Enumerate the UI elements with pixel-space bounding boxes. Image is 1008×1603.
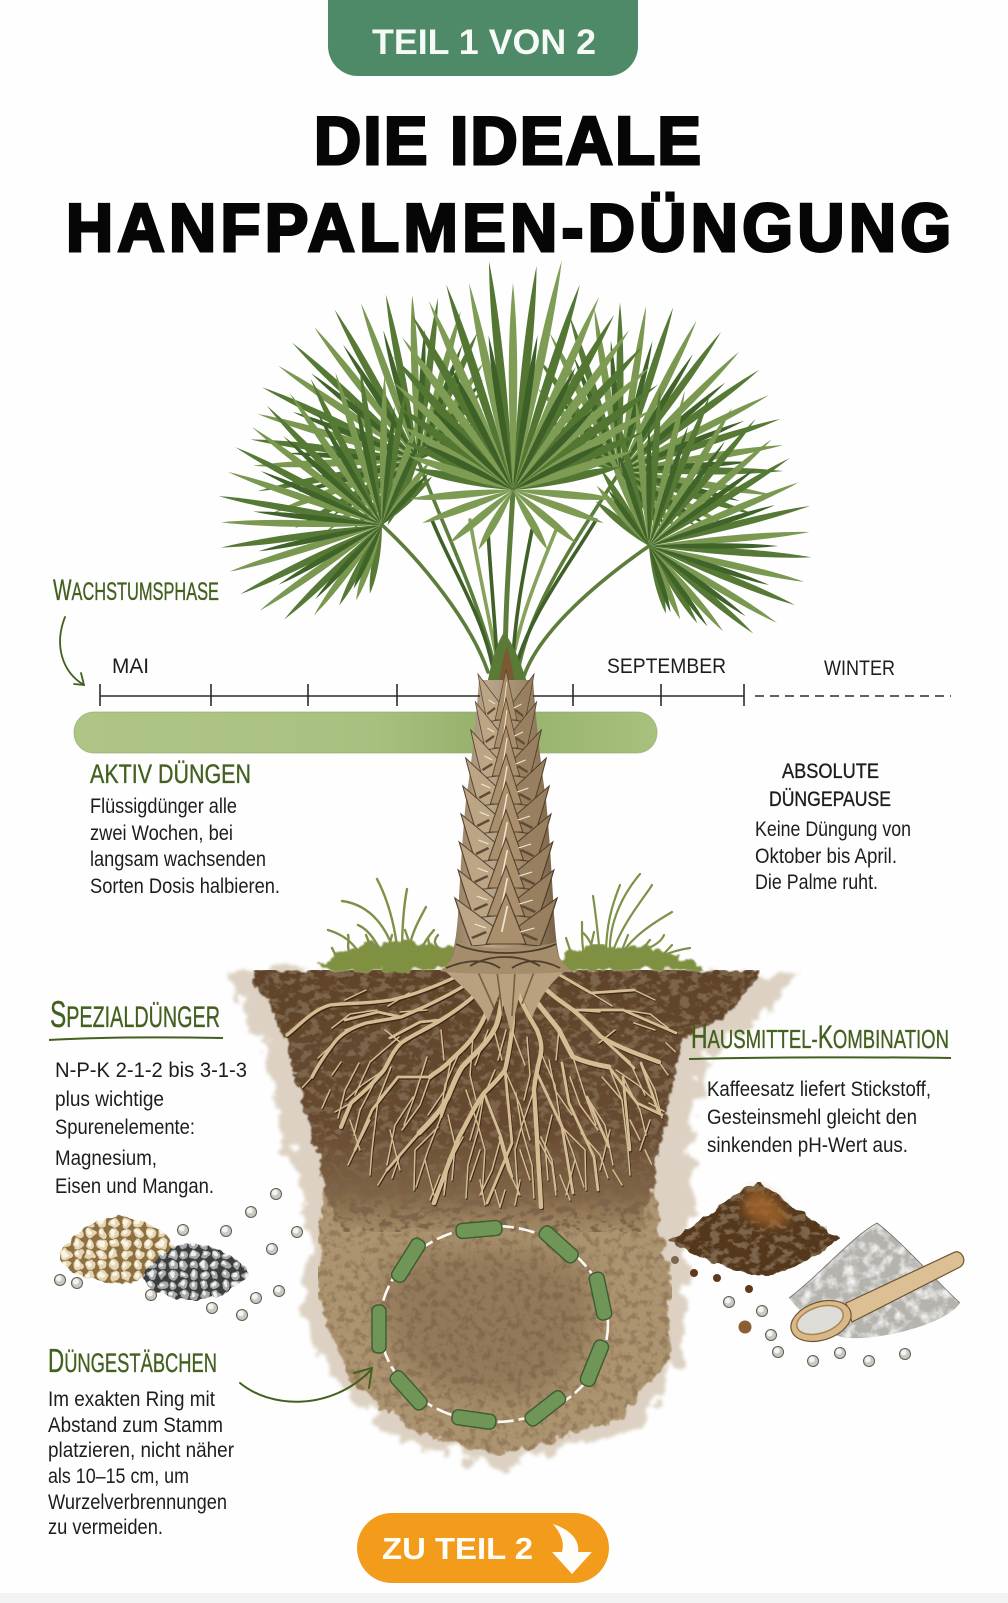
text block: Absolute Düngepause: Oktober bis April. (755, 845, 897, 868)
coffee grounds (668, 1182, 840, 1276)
badge: Teil 1 von 2 (328, 0, 638, 76)
grey granules (143, 1243, 248, 1300)
lower right frond (557, 344, 861, 673)
text block: Düngestäbchen: Im exakten Ring mit (48, 1388, 215, 1411)
text block: Aktiv düngen: langsam wachsenden (90, 848, 266, 871)
trunk (440, 670, 572, 974)
heading: Wachstumsphase: WACHSTUMSPHASE (53, 574, 219, 607)
scattered crumbs (724, 1296, 734, 1308)
stems (382, 460, 649, 680)
text block: Spezialdünger: plus wichtige (55, 1088, 164, 1111)
text block: Aktiv düngen: Flüssigdünger alle (90, 795, 237, 818)
upper left frond (197, 241, 532, 580)
text block: Aktiv düngen: AKTIV DÜNGEN (90, 759, 251, 789)
text block: Hausmittel-Kombination (689, 1019, 951, 1157)
text block: Spezialdünger (49, 994, 247, 1198)
text block: Düngestäbchen: platzieren, nicht näher (48, 1439, 234, 1462)
text block: Absolute Düngepause (755, 760, 911, 894)
button: Zu Teil 2: ZU TEIL 2 (382, 1531, 533, 1566)
text block: Düngestäbchen: als 10–15 cm, um (48, 1465, 189, 1488)
text block: Düngestäbchen: Abstand zum Stamm (48, 1414, 223, 1437)
label: Mai: MAI (112, 655, 149, 678)
text block: Spezialdünger: N-P-K 2-1-2 bis 3-1-3 (55, 1059, 247, 1082)
label: September: SEPTEMBER (607, 655, 726, 678)
upper dark soil (250, 970, 760, 1232)
home remedy piles (668, 1182, 964, 1366)
soil fringe (226, 972, 800, 1464)
text block: Aktiv düngen (90, 759, 280, 898)
palm illustration (172, 241, 861, 692)
title: HANFPALMEN-DÜNGUNG (66, 191, 951, 266)
text block: Absolute Düngepause: Keine Düngung von (755, 818, 911, 841)
text block: Düngestäbchen: Wurzelverbrennungen (48, 1491, 227, 1514)
upper right frond (492, 250, 834, 574)
text block: Spezialdünger: SPEZIALDÜNGER (50, 994, 220, 1035)
label: Winter: WINTER (824, 657, 895, 680)
text block: Spezialdünger: Spurenelemente: (55, 1116, 195, 1139)
arrow: Düngestäbchen to ring (240, 1368, 372, 1402)
rock flour (789, 1223, 960, 1338)
granule piles (54, 1188, 302, 1320)
right tuft (556, 945, 702, 970)
crown sheath (486, 632, 530, 692)
left tuft (318, 941, 456, 971)
text block: Hausmittel-Kombination: HAUSMITTEL-KOMBINATION (691, 1019, 949, 1055)
text block: Spezialdünger: Magnesium, (55, 1147, 157, 1170)
sticks (372, 1220, 613, 1430)
lower left frond (172, 328, 467, 656)
text block: Düngestäbchen: DÜNGESTÄBCHEN (48, 1342, 217, 1379)
soil cross-section (226, 970, 800, 1464)
arrow: Wachstumsphase to timeline (60, 617, 84, 685)
dashed ring (380, 1226, 608, 1422)
timeline bar: active fertilising period (74, 712, 657, 753)
text block: Düngestäbchen: zu vermeiden. (48, 1516, 163, 1539)
text block: Hausmittel-Kombination: Gesteinsmehl gleicht den (707, 1106, 917, 1129)
roots (287, 968, 701, 1208)
text block: Aktiv düngen: zwei Wochen, bei (90, 822, 233, 845)
timeline (100, 655, 951, 706)
icon: curved down arrow (552, 1524, 592, 1574)
wooden spoon (846, 1252, 964, 1322)
cream granules (60, 1216, 176, 1282)
text block: Düngestäbchen (48, 1342, 234, 1539)
badge: Teil 1 von 2: TEIL 1 VON 2 (372, 23, 596, 62)
text block: Hausmittel-Kombination: sinkenden pH-Wert aus. (707, 1134, 908, 1157)
text block: Absolute Düngepause: Die Palme ruht. (755, 871, 878, 894)
button: Zu Teil 2 (357, 1513, 609, 1583)
grass tufts (318, 874, 702, 971)
fertiliser stick ring (372, 1220, 613, 1430)
lower soil (318, 1190, 672, 1456)
centre frond (390, 260, 661, 552)
text block: Aktiv düngen: Sorten Dosis halbieren. (90, 875, 280, 898)
text block: Absolute Düngepause: ABSOLUTE (782, 760, 879, 783)
text block: Spezialdünger: Eisen und Mangan. (55, 1175, 214, 1198)
trunk scales (478, 670, 534, 722)
trunk base (440, 942, 572, 974)
text block: Absolute Düngepause: DÜNGEPAUSE (769, 788, 891, 811)
title: DIE IDEALE (314, 104, 701, 179)
scattered granules (270, 1188, 282, 1200)
text block: Hausmittel-Kombination: Kaffeesatz liefert Stickstoff, (707, 1078, 931, 1101)
title (66, 104, 951, 266)
